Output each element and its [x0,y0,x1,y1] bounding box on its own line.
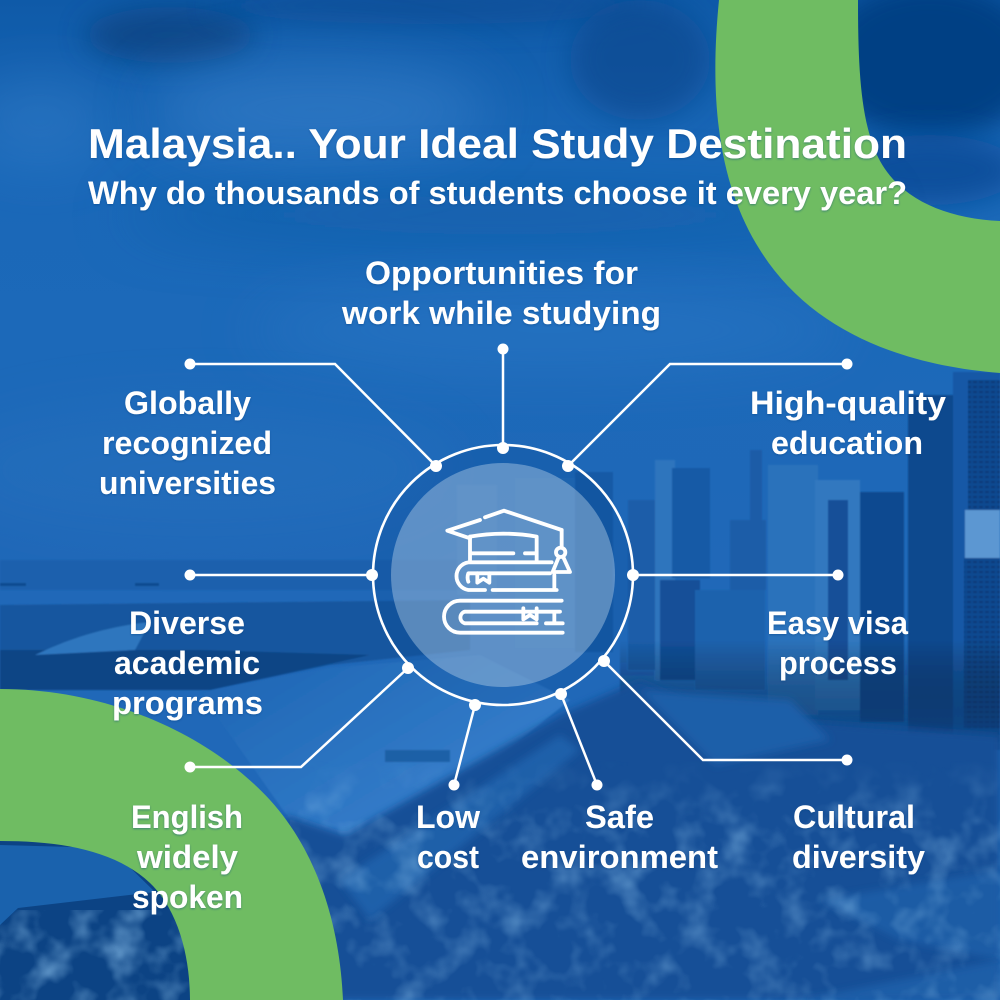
hub: darker band [373,445,633,705]
label: english widely spoken [131,799,243,915]
label: opportunities for work while studying: work while studying [341,295,661,331]
label: low cost [416,799,480,875]
label: opportunities for work while studying: Opportunities for [365,255,638,291]
label: easy visa process: Easy visa [767,605,908,641]
connector: safe environment [555,688,602,790]
skyline [457,372,1000,750]
connector: high-quality education [562,358,852,472]
label: low cost: Low [416,799,480,835]
green arc: bottom left [0,689,343,1000]
connector: english widely spoken [184,662,414,772]
label: diverse academic programs: academic [114,645,260,681]
icon: graduation cap on stacked books [444,511,570,633]
connector: diverse programs [184,569,378,581]
connector: low cost [448,699,481,790]
connector: easy visa [627,569,844,581]
label: globally recognized universities: Globally [124,385,251,421]
title: Malaysia.. Your Ideal Study Destination [88,120,907,167]
label: high-quality education [750,385,946,461]
connector: globally recognized [184,358,442,472]
clouds [0,0,1000,530]
label: globally recognized universities [99,385,276,501]
label: safe environment: Safe [585,799,654,835]
label: high-quality education: High-quality [750,385,946,421]
label: easy visa process [767,605,908,681]
label: cultural diversity: diversity [792,839,925,875]
central hub [373,445,633,705]
label: easy visa process: process [779,645,897,681]
roof and trees at lower left [0,838,200,1000]
label: safe environment: environment [521,839,718,875]
connector: cultural diversity [598,655,852,766]
label: low cost: cost [417,839,479,875]
label: diverse academic programs [112,605,263,721]
hub: translucent disc [391,463,615,687]
label: english widely spoken: English [131,799,243,835]
label: diverse academic programs: programs [112,685,263,721]
label: cultural diversity: Cultural [793,799,915,835]
label: english widely spoken: widely [136,839,238,875]
label: english widely spoken: spoken [132,879,243,915]
label: opportunities for work while studying [341,255,661,331]
green arc: top right [715,0,1000,373]
hub: ring [373,445,633,705]
label: cultural diversity [792,799,925,875]
connector: opportunities for work [497,344,509,454]
lower city and trees [285,680,1000,1000]
label: safe environment [521,799,718,875]
label: high-quality education: education [771,425,923,461]
label: globally recognized universities: recognized [102,425,272,461]
harbour and far shore [0,560,570,880]
label: diverse academic programs: Diverse [129,605,245,641]
subtitle: Why do thousands of students choose it every year? [88,175,907,211]
label: globally recognized universities: universities [99,465,276,501]
